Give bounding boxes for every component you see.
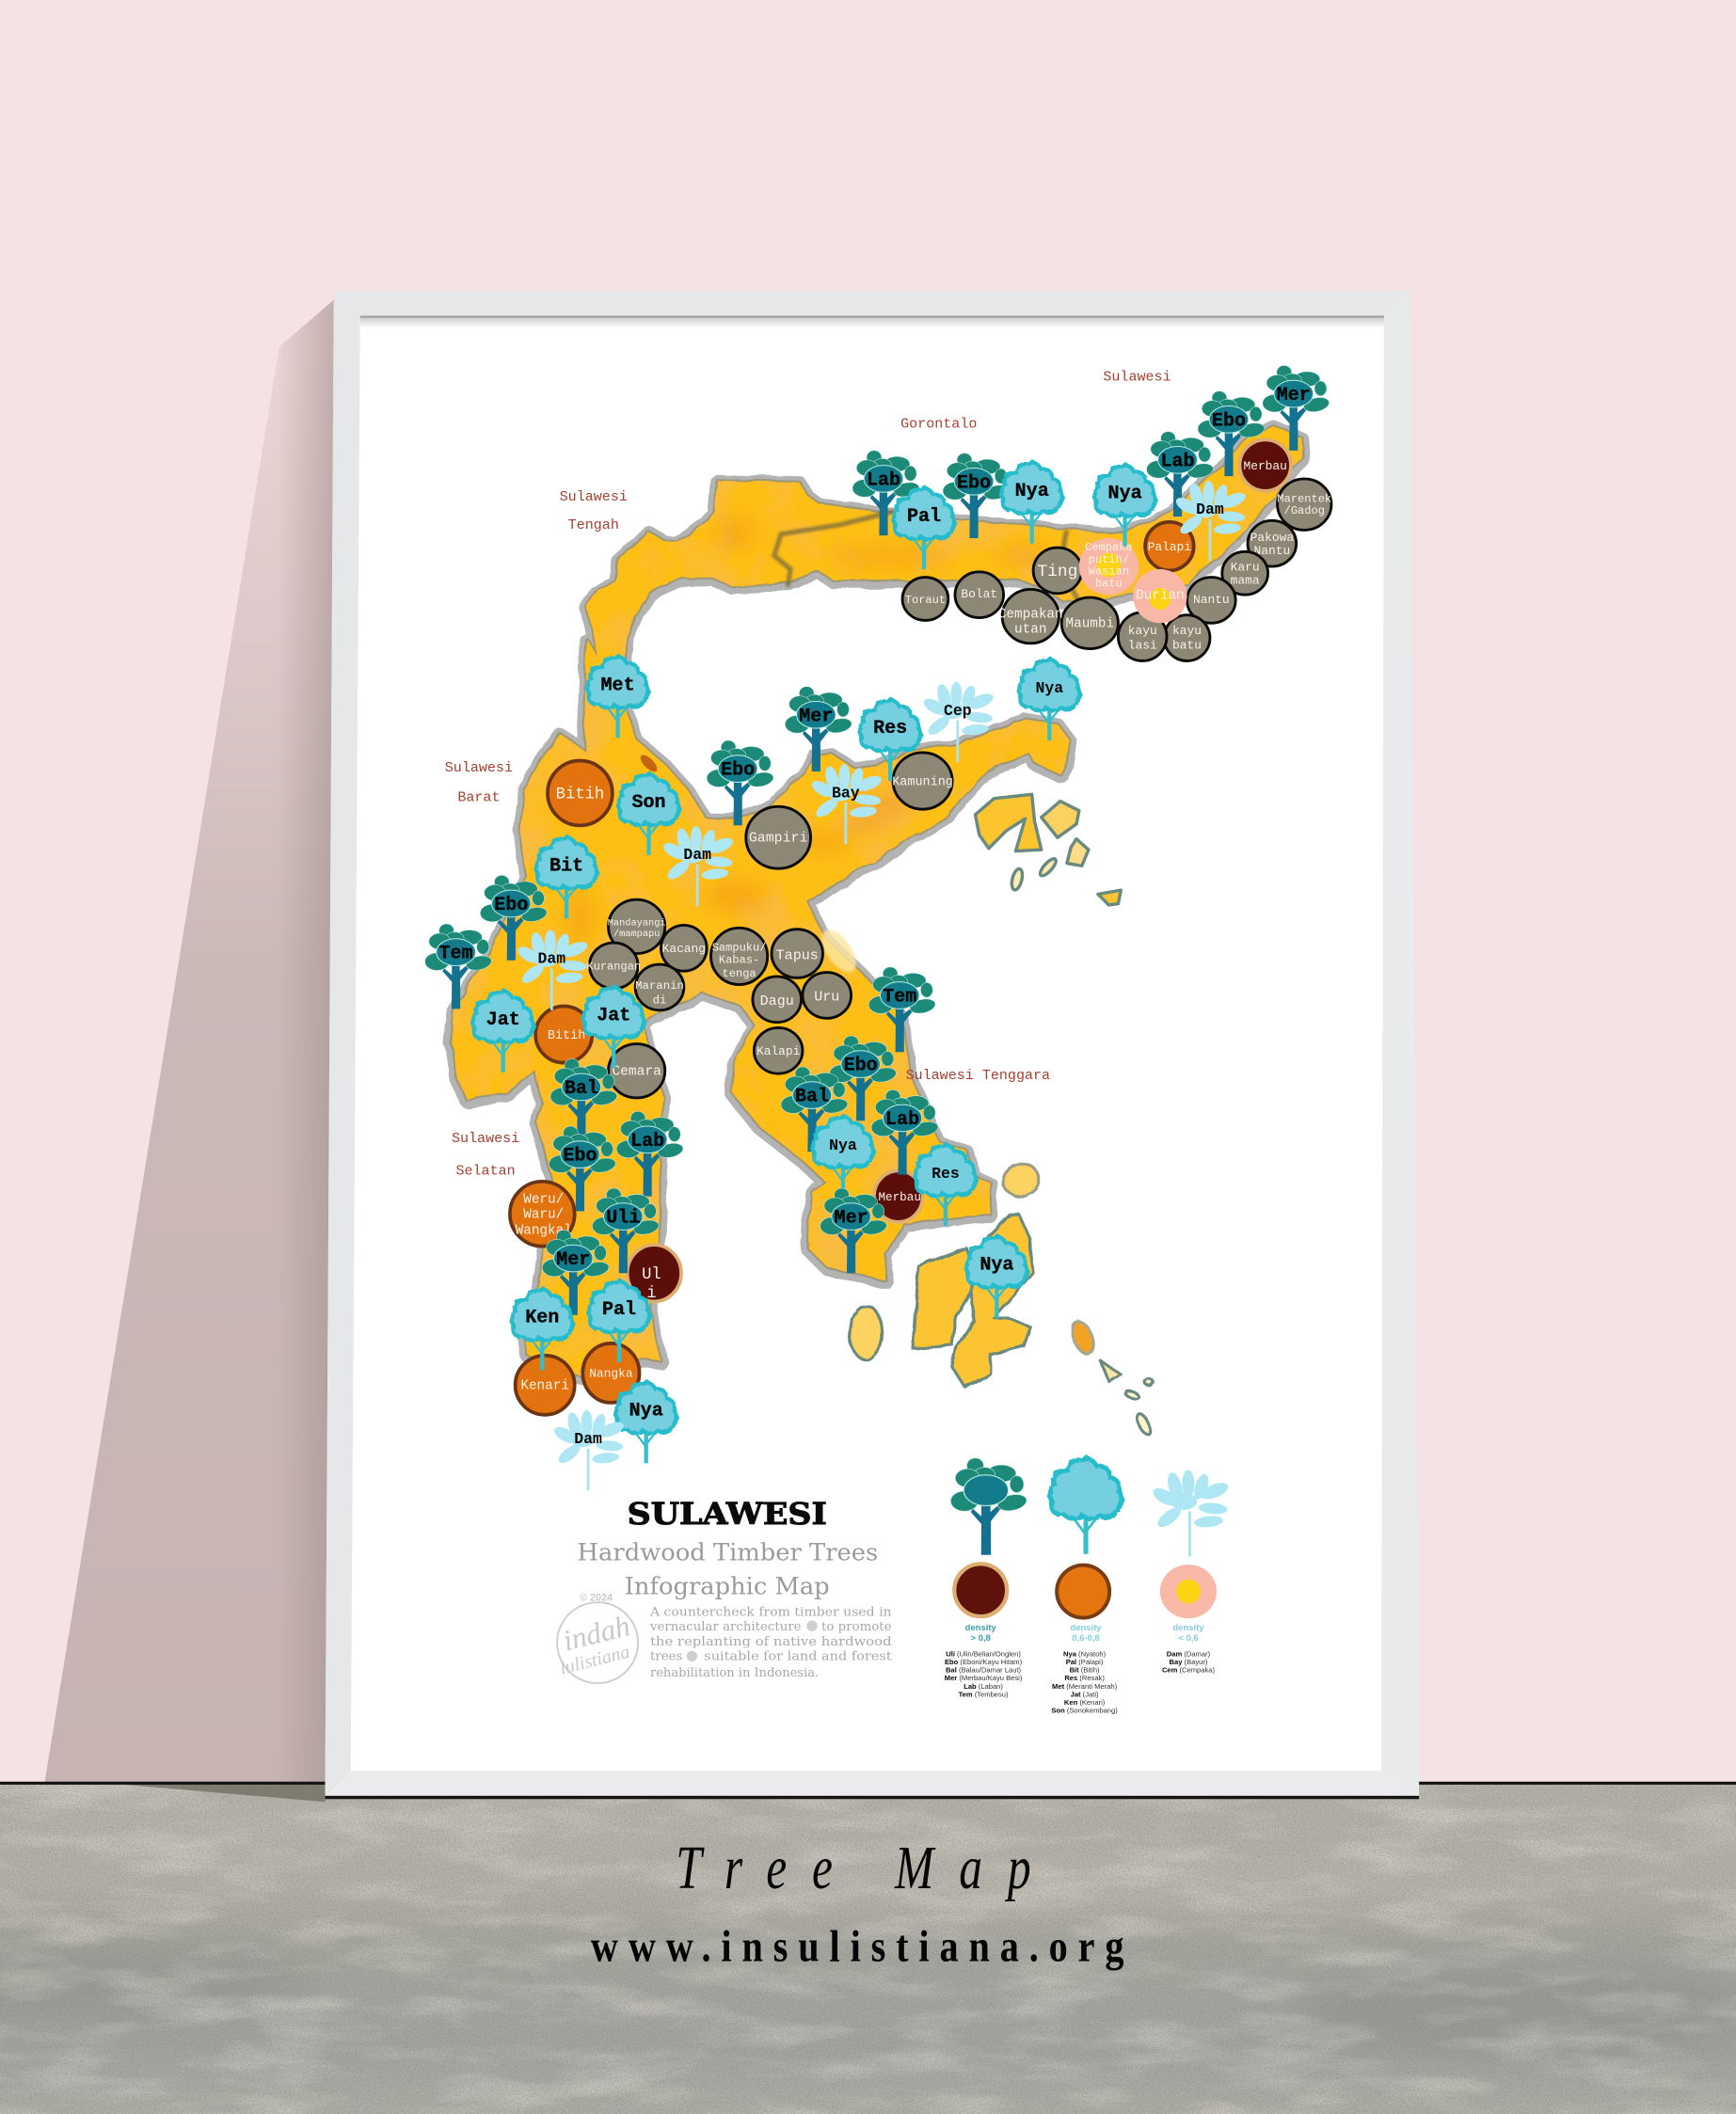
label: Sulawesi Tengah: Tengah — [568, 517, 619, 533]
description paragraph: the replanting of native hardwood — [650, 1635, 892, 1649]
dark tree: Ebo: Ebo — [1212, 410, 1246, 432]
circle: Cempakan utan: utan — [1014, 622, 1046, 637]
mid tree: Nya east — [1019, 660, 1080, 740]
concrete floor — [0, 1782, 1736, 2114]
dark tree: Ebo — [1198, 391, 1266, 476]
dark tree: Lab west: Lab — [867, 469, 900, 491]
circle: Cempaka putih: batu — [1095, 578, 1123, 591]
circle: Nantu: Nantu — [1193, 593, 1230, 607]
species list: Bit (Bitih) — [1070, 1666, 1100, 1675]
dark tree: Ebo west — [480, 875, 549, 961]
circle: Marentek/Gadog: Marentek — [1277, 492, 1331, 505]
circle: Kalapi: Kalapi — [757, 1044, 801, 1058]
author logo: © 2024 — [580, 1593, 613, 1604]
circle: Toraut — [902, 578, 948, 620]
circle: Gampiri: Gampiri — [749, 832, 808, 847]
circle: Gampiri — [746, 806, 811, 868]
circle: Uli: Ul — [642, 1266, 661, 1284]
species list: Cem (Cempaka) — [1162, 1666, 1215, 1675]
dark tree: Tem west — [425, 924, 493, 1009]
light tree: Bay: Bay — [832, 784, 860, 802]
dark tree: Mer south: Mer — [556, 1249, 590, 1271]
Banggai islands — [975, 794, 1121, 905]
mid tree: Nya south: Nya — [629, 1401, 663, 1423]
label: Sulawesi Tenggara: Sulawesi Tenggara — [906, 1067, 1050, 1084]
island shadow outline — [451, 427, 1301, 1378]
dark tree: Mer: Mer — [1277, 385, 1311, 406]
subtitle: Hardwood Timber Trees — [578, 1539, 878, 1566]
circle: Mandayangi: /mampapu — [613, 929, 660, 940]
light tree: Dam south — [551, 1410, 626, 1490]
author logo — [557, 1593, 638, 1683]
species list: Mer (Merbau/Kayu Besi) — [945, 1674, 1023, 1682]
circle: Merbau north: Merbau — [1243, 459, 1287, 473]
circle: Sampuku/Kabas-tenga — [710, 928, 768, 985]
dark tree: Lab southeast: Lab — [885, 1109, 919, 1131]
frame shadow on wall — [44, 298, 336, 1783]
dark tree: Mer — [1263, 366, 1330, 451]
circle: Weru/Waru/Wangkal — [510, 1182, 575, 1247]
circle: Cempaka putih: Wasian — [1089, 565, 1129, 579]
circle: Uli: i — [646, 1285, 657, 1303]
dark tree: Tem east: Tem — [883, 986, 916, 1008]
circle: Merbau south: Merbau — [878, 1191, 921, 1204]
description paragraph — [649, 1605, 893, 1680]
circle: Pakowa Nantu — [1248, 520, 1297, 566]
label: Sulawesi Barat: Sulawesi — [445, 759, 513, 776]
circle: Cempakan utan — [998, 589, 1063, 644]
mid tree: Nya north — [1094, 466, 1155, 547]
mid tree: Ken — [512, 1290, 573, 1371]
circle: Cempakan utan: Cempakan — [998, 608, 1063, 623]
circle: Cemara — [609, 1044, 665, 1098]
circle: Cempaka putih: Cempaka — [1085, 541, 1133, 554]
dark stain patches — [638, 753, 660, 774]
species list: Son (Sonokembang) — [1051, 1707, 1118, 1715]
circle: Maranindi: Maranin — [635, 979, 684, 993]
species list: Ebo (Eboni/Kayu Hitam) — [945, 1658, 1023, 1666]
dark tree: Bal southeast: Bal — [795, 1087, 829, 1108]
mid tree: Ken: Ken — [525, 1308, 559, 1329]
circle: Kurangan — [586, 943, 641, 989]
species list — [1162, 1649, 1215, 1675]
light tree: Cep — [921, 682, 995, 762]
label: Sulawesi Selatan: Selatan — [455, 1163, 516, 1180]
circle: Uru: Uru — [814, 989, 839, 1006]
description paragraph: to promote — [821, 1620, 892, 1634]
circle: Bolat: Bolat — [961, 587, 997, 601]
circle: Palapi: Palapi — [1148, 540, 1191, 554]
circle: Mandayangi — [608, 899, 666, 954]
dark tree: Uli — [592, 1188, 660, 1273]
circle: Mandayangi: Mandayangi — [608, 917, 666, 929]
circle: Pakowa Nantu: Nantu — [1254, 544, 1290, 558]
dark tree: Ebo south — [549, 1126, 617, 1211]
species list: Ken (Kenari) — [1064, 1698, 1106, 1707]
circle: Durian: Durian — [1136, 589, 1185, 604]
dark tree: Tem west: Tem — [438, 944, 473, 965]
dark tree: Lab southeast — [871, 1089, 939, 1175]
circle: Cempaka putih — [1079, 538, 1139, 595]
circle: kayu batu: kayu — [1172, 624, 1202, 638]
circle: Kacang — [661, 925, 707, 971]
circle: Kenari — [516, 1356, 575, 1415]
circle: Nantu — [1187, 578, 1235, 623]
circle: Sampuku/Kabas-tenga: Kabas- — [719, 954, 759, 967]
dark tree: Bal south: Bal — [565, 1078, 598, 1100]
species list: Nya (Nyatoh) — [1063, 1649, 1107, 1658]
mid tree: Jat west: Jat — [486, 1009, 520, 1031]
species list: Res (Resak) — [1064, 1674, 1105, 1682]
circle: Kamuning: Kamuning — [892, 775, 953, 789]
dark tree: Lab: Lab — [1160, 451, 1195, 472]
species list: Uli (Ulin/Belian/Onglen) — [946, 1649, 1021, 1658]
circle: Uru — [803, 973, 852, 1018]
description paragraph: suitable for land and forest — [704, 1650, 893, 1664]
description paragraph: rehabilitation in Indonesia. — [650, 1666, 819, 1680]
dark tree: Bal southeast — [781, 1067, 849, 1152]
circle: Weru/Waru/Wangkal: Wangkal — [516, 1224, 572, 1239]
mid tree: Nya southeast — [812, 1117, 874, 1198]
mid tree: Pal: Pal — [907, 506, 941, 528]
orange watercolor patches — [566, 517, 1055, 946]
circle: Bitih south: Bitih — [548, 1029, 585, 1043]
circle: Sampuku/Kabas-tenga: tenga — [723, 967, 757, 980]
circle: Kenari: Kenari — [520, 1379, 569, 1394]
title block — [557, 1497, 893, 1683]
mid tree: Nya north: Nya — [1108, 484, 1142, 505]
circle: Dagu — [753, 977, 802, 1023]
mid tree: Res — [860, 700, 921, 781]
mid tree: Pal south — [588, 1281, 650, 1362]
circle: Maranindi: di — [653, 994, 666, 1008]
mid tree: Met: Met — [601, 675, 635, 696]
mid tree: Nya south — [615, 1383, 677, 1463]
dark tree: Lab south: Lab — [630, 1131, 664, 1152]
author logo: indah — [560, 1609, 633, 1658]
light tree: Cep: Cep — [944, 702, 972, 720]
circle: kayu lasi: lasi — [1128, 639, 1157, 653]
circle: Durian — [1133, 569, 1187, 623]
mid tree: Res: Res — [873, 718, 907, 739]
dark tree: Ebo southeast: Ebo — [844, 1056, 878, 1077]
circle: Nangka: Nangka — [589, 1367, 633, 1381]
light tree: Dam north — [1173, 481, 1248, 561]
label: Sulawesi Selatan: Sulawesi — [452, 1130, 519, 1147]
caption: Tree Map: Tree Map — [676, 1833, 1031, 1902]
Gorontalo province border — [774, 511, 1079, 601]
mainland watercolor yellow — [451, 426, 1301, 1377]
mid tree: Met — [587, 657, 648, 738]
circle: Tapus: Tapus — [776, 946, 819, 963]
circle: Pakowa Nantu: Pakowa — [1250, 531, 1294, 545]
circle: Maumbi: Maumbi — [1066, 617, 1114, 632]
density label: 0,6-0,8 — [1072, 1633, 1100, 1644]
circle: Weru/Waru/Wangkal: Waru/ — [523, 1208, 564, 1223]
dark tree: Ebo Gorontalo — [943, 453, 1011, 538]
shadow rim on coast — [451, 426, 1301, 1377]
dark tree: Mer south — [542, 1230, 610, 1315]
circle: Ting — [1033, 548, 1082, 594]
circle: kayu batu: batu — [1172, 639, 1202, 653]
mid tree: Nya: Nya — [1015, 481, 1049, 502]
circle: kayu lasi: kayu — [1128, 624, 1157, 638]
light tree: Dam central — [661, 826, 735, 906]
icon: teal tree — [1049, 1458, 1123, 1554]
circle: Kurangan: Kurangan — [586, 961, 641, 974]
circle: Merbau south — [874, 1170, 923, 1222]
dark tree: Bal south — [550, 1058, 618, 1144]
dark tree: Tem east — [868, 967, 936, 1052]
circle: Kamuning — [892, 753, 953, 809]
picture frame — [325, 292, 1419, 1799]
dark tree: Ebo south: Ebo — [563, 1146, 597, 1168]
light tree: Bay — [809, 764, 884, 844]
circle: kayu batu — [1164, 615, 1210, 660]
species list: Pal (Palapi) — [1066, 1658, 1104, 1666]
dark tree: Mer central: Mer — [799, 706, 833, 727]
mid tree: Nya — [1001, 463, 1062, 544]
circle: Palapi — [1145, 522, 1194, 570]
mid tree: Nya Buton: Nya — [979, 1255, 1013, 1277]
circle: Karu mama: Karu — [1231, 560, 1260, 574]
circle: Merbau north — [1239, 439, 1291, 491]
dark tree: Lab south — [616, 1111, 684, 1197]
circle: Nangka — [582, 1343, 640, 1403]
mid tree: Bit — [535, 837, 597, 918]
species list: Lab (Laban) — [964, 1682, 1003, 1691]
label: Sulawesi Selatan — [452, 1130, 519, 1180]
label: Sulawesi Tengah: Sulawesi — [560, 488, 628, 505]
dark tree: Mer central — [785, 687, 852, 771]
circle: Kalapi — [754, 1027, 803, 1073]
light tree: Dam north: Dam — [1196, 501, 1224, 518]
label: Gorontalo: Gorontalo — [900, 415, 977, 432]
mid tree: Jat west — [472, 992, 534, 1073]
density label: density — [1172, 1623, 1204, 1633]
dark tree: Lab — [1147, 432, 1215, 517]
circle: Ting: Ting — [1037, 563, 1077, 581]
species list: Tem (Tembesu) — [959, 1690, 1009, 1698]
circle: Maumbi — [1061, 597, 1118, 649]
circle: Karu mama — [1222, 551, 1268, 595]
Buton and Muna islands — [850, 1164, 1153, 1436]
mid tree: Jat: Jat — [597, 1006, 630, 1027]
dark tree: Uli: Uli — [606, 1208, 640, 1230]
species list: Bal (Balau/Damar Laut) — [946, 1666, 1022, 1675]
species list: Jat (Jati) — [1071, 1690, 1099, 1698]
species list: Bay (Bayur) — [1170, 1658, 1208, 1666]
light tree: Dam west: Dam — [538, 950, 565, 968]
label: Sulawesi Barat — [445, 759, 513, 806]
dark tree: Ebo central — [707, 740, 774, 825]
mid tree: Bit: Bit — [549, 855, 583, 877]
mid tree: Pal — [893, 488, 955, 569]
dark tree: Mer southeast — [820, 1188, 888, 1273]
light tree: Dam west — [516, 930, 589, 1010]
mid tree: Nya Buton — [966, 1237, 1027, 1318]
legend — [945, 1458, 1231, 1715]
mid tree: Son — [618, 774, 679, 855]
dark tree: Ebo Gorontalo: Ebo — [957, 472, 991, 494]
circle: Bitih south — [535, 1006, 592, 1063]
description paragraph: A countercheck from timber used in — [649, 1605, 892, 1619]
label: Sulawesi Utara: Sulawesi — [1103, 368, 1171, 385]
species list — [945, 1649, 1023, 1698]
circle: Sampuku/Kabas-tenga: Sampuku/ — [712, 942, 766, 955]
mid tree: Nya east: Nya — [1035, 679, 1063, 697]
light tree: Dam central: Dam — [683, 846, 711, 864]
label: Sulawesi Tengah — [560, 488, 628, 533]
circle: Karu mama: mama — [1231, 574, 1260, 588]
mid tree: Res southeast — [915, 1145, 977, 1226]
species list: Met (Meranti Merah) — [1052, 1682, 1118, 1691]
map of Sulawesi — [451, 426, 1301, 1436]
circle: Marentek/Gadog — [1277, 479, 1331, 530]
legend column: high density — [945, 1458, 1028, 1698]
density label: density — [1070, 1623, 1102, 1633]
density label: < 0,6 — [1178, 1633, 1199, 1644]
species list — [1051, 1649, 1118, 1715]
icon: dark density circle — [954, 1564, 1007, 1616]
circle: Bolat — [955, 572, 1004, 618]
icon: dark tree — [950, 1458, 1028, 1555]
local timber circles — [510, 439, 1331, 1415]
dark tree: Ebo west: Ebo — [494, 895, 528, 916]
province labels — [445, 368, 1171, 1180]
subtitle — [578, 1539, 878, 1599]
circle: Tapus — [772, 930, 822, 978]
circle: Weru/Waru/Wangkal: Weru/ — [523, 1193, 564, 1208]
description paragraph: vernacular architecture — [649, 1620, 802, 1634]
subtitle: Infographic Map — [625, 1572, 830, 1599]
pale coast near the gulf — [815, 924, 863, 978]
dark tree: Ebo southeast — [830, 1036, 898, 1121]
mid tree: Nya southeast: Nya — [829, 1136, 857, 1154]
circle: Toraut: Toraut — [905, 594, 946, 607]
main title: SULAWESI — [628, 1497, 827, 1532]
author logo: lulistiana — [558, 1642, 632, 1678]
circle: Cemara: Cemara — [612, 1065, 661, 1080]
mid tree: Res southeast: Res — [932, 1165, 960, 1183]
circle: Uli — [628, 1245, 681, 1303]
caption: website: www.insulistiana.org — [591, 1922, 1124, 1971]
label: Sulawesi Barat: Barat — [457, 789, 500, 806]
circle: Dagu: Dagu — [760, 993, 794, 1009]
dark tree: Ebo central: Ebo — [721, 760, 755, 782]
density label: > 0,8 — [971, 1633, 991, 1644]
dark tree: Mer southeast: Mer — [835, 1208, 868, 1230]
legend column: low density — [1151, 1470, 1231, 1675]
circle: kayu lasi — [1118, 612, 1167, 660]
legend column: medium density — [1049, 1458, 1123, 1715]
circle: Bitih — [548, 761, 613, 825]
icon: pink density circle — [1160, 1565, 1217, 1618]
mid tree: Jat — [583, 988, 645, 1068]
mid tree: Son: Son — [631, 792, 666, 814]
tree markers — [425, 366, 1330, 1490]
circle: Marentek/Gadog: /Gadog — [1284, 504, 1325, 517]
circle: Bitih: Bitih — [556, 787, 604, 804]
circle: Cempaka putih: putih/ — [1089, 553, 1129, 566]
density label: density — [965, 1623, 996, 1633]
icon: orange density circle — [1057, 1566, 1109, 1618]
circle: Kacang: Kacang — [662, 942, 706, 956]
light tree: Dam south: Dam — [574, 1430, 602, 1448]
circle: Maranindi — [635, 964, 684, 1010]
description paragraph: trees — [650, 1650, 682, 1664]
icon: pale tree — [1151, 1470, 1231, 1557]
dark tree: Lab west — [852, 451, 920, 535]
mid tree: Pal south: Pal — [602, 1299, 636, 1321]
species list: Dam (Damar) — [1167, 1649, 1211, 1658]
